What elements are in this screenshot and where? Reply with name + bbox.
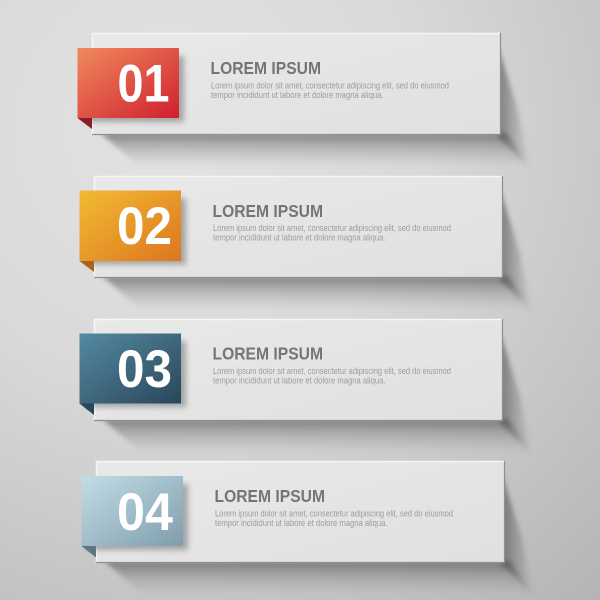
card shadow 01 [100, 46, 530, 168]
card 04 [96, 461, 504, 563]
number 04: 04 [117, 483, 173, 542]
label shadow 03 [86, 341, 186, 407]
card shadow 02 [102, 189, 532, 311]
panel: item 02 [80, 176, 532, 311]
number tag 04 [82, 476, 183, 546]
number 03: 03 [117, 340, 172, 399]
heading 02: LOREM IPSUM [212, 201, 323, 221]
panel: item 04 [82, 461, 534, 596]
number tag 01 [78, 48, 179, 118]
card shadow 03 [102, 332, 532, 454]
body text 04: Lorem ipsum dolor sit amet, consectetur adipiscing elit, sed do eiusmod [215, 508, 453, 518]
ribbon fold 04 [82, 546, 96, 558]
body text 03: tempor incididunt ut labore et dolore magna aliqua. [213, 376, 386, 386]
panel: item 01 [78, 33, 530, 168]
body text 02: tempor incididunt ut labore et dolore magna aliqua. [213, 232, 386, 242]
heading 04: LOREM IPSUM [214, 486, 325, 506]
number 01: 01 [118, 54, 170, 114]
label shadow 04 [88, 484, 188, 550]
ribbon fold 03 [80, 404, 94, 415]
body text 02 [213, 223, 451, 242]
number tag 03 [80, 334, 181, 404]
body text 01 [211, 80, 449, 100]
number tag 02 [80, 190, 181, 261]
card 02 [94, 176, 502, 278]
body text 04 [215, 508, 453, 528]
body text 01: tempor incididunt ut labore et dolore magna aliqua. [211, 90, 384, 100]
label shadow 01 [84, 56, 184, 122]
body text 01: Lorem ipsum dolor sit amet, consectetur adipiscing elit, sed do eiusmod [211, 80, 449, 90]
heading 03: LOREM IPSUM [212, 344, 323, 364]
number 02: 02 [117, 197, 172, 256]
body text 03: Lorem ipsum dolor sit amet, consectetur adipiscing elit, sed do eiusmod [213, 366, 451, 376]
heading 01: LOREM IPSUM [210, 58, 321, 78]
label shadow 02 [86, 198, 186, 264]
card shadow 04 [104, 474, 534, 596]
panel: item 03 [80, 319, 532, 454]
ribbon fold 01 [78, 118, 92, 129]
card 03 [94, 319, 502, 421]
body text 04: tempor incididunt ut labore et dolore magna aliqua. [215, 518, 388, 528]
ribbon fold 02 [80, 261, 94, 272]
body text 03 [213, 366, 451, 386]
body text 02: Lorem ipsum dolor sit amet, consectetur adipiscing elit, sed do eiusmod [213, 223, 451, 233]
card 01 [92, 33, 500, 135]
